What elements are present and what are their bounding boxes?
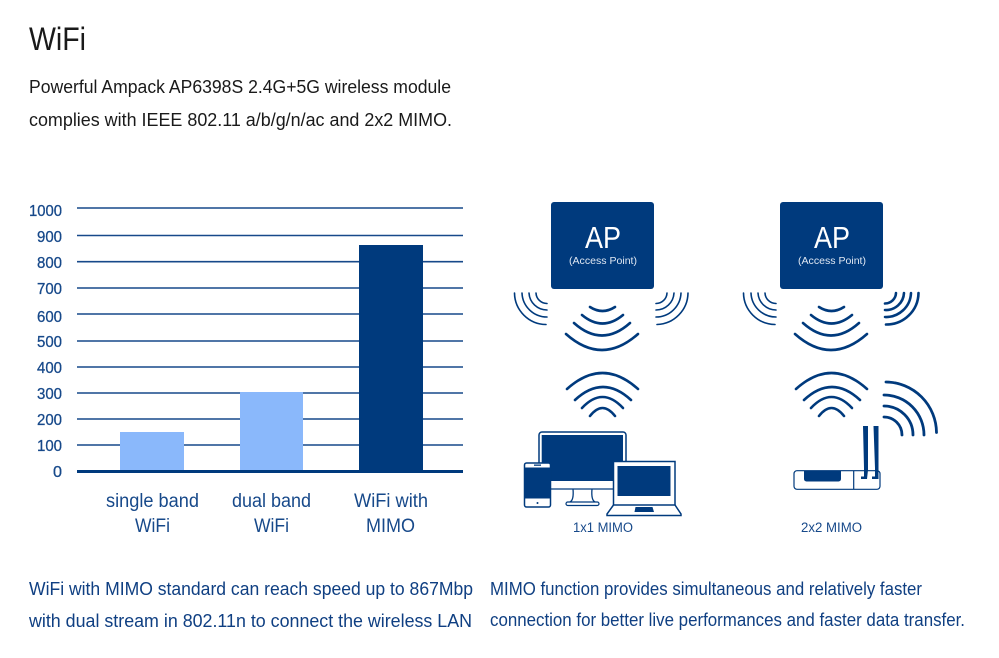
x axis labels: dual band (232, 491, 311, 512)
tablet (524, 463, 550, 507)
bar: dual band WiFi (240, 392, 303, 471)
y axis labels: 200 (37, 412, 62, 429)
bar: WiFi with MIMO (359, 245, 423, 471)
y axis labels: 800 (37, 255, 62, 272)
laptop (614, 462, 675, 506)
intro text: complies with IEEE 802.11 a/b/g/n/ac and 2x2 MIMO. (29, 110, 452, 130)
y axis labels (29, 203, 62, 481)
AP box: AP (585, 220, 621, 255)
x axis labels (106, 491, 428, 537)
diagram: 2x2 MIMO (744, 202, 936, 535)
AP box: AP (814, 220, 850, 255)
y axis labels: 0 (53, 464, 62, 481)
bar chart (29, 203, 463, 537)
signal arcs from AP (744, 293, 918, 350)
x axis labels: WiFi (135, 516, 170, 537)
y axis labels: 500 (37, 334, 62, 351)
y axis labels: 900 (37, 229, 62, 246)
icon: router with antennas (794, 426, 880, 489)
caption: 2x2 MIMO (801, 520, 862, 535)
y axis labels: 400 (37, 360, 62, 377)
monitor (539, 432, 626, 489)
bottom right text: MIMO function provides simultaneous and relatively faster (490, 579, 922, 599)
y axis labels: 300 (37, 386, 62, 403)
bottom left text: with dual stream in 802.11n to connect the wireless LAN (28, 611, 472, 631)
AP box: (Access Point) (569, 255, 637, 267)
x axis labels: MIMO (366, 516, 415, 537)
AP box (551, 202, 654, 289)
bottom right text: connection for better live performances and faster data transfer. (490, 610, 965, 630)
icon: devices (524, 432, 681, 516)
bottom left text: WiFi with MIMO standard can reach speed up to 867Mbp (29, 579, 473, 599)
y axis labels: 700 (37, 281, 62, 298)
title: WiFi (29, 21, 86, 57)
diagram: 1x1 MIMO (514, 202, 688, 535)
signal arcs from AP (514, 293, 688, 350)
y axis labels: 1000 (29, 203, 62, 220)
intro text (29, 77, 452, 130)
bar: single band WiFi (120, 432, 184, 471)
y axis labels: 600 (37, 309, 62, 326)
x axis labels: single band (106, 491, 199, 512)
caption: 1x1 MIMO (573, 520, 633, 535)
x axis labels: WiFi with (354, 491, 428, 512)
AP box (780, 202, 883, 289)
signal arcs to router (796, 373, 867, 416)
bottom left text (28, 579, 473, 631)
signal arcs to device (567, 373, 638, 416)
x axis labels: WiFi (254, 516, 289, 537)
y axis labels: 100 (37, 438, 62, 455)
AP box: (Access Point) (798, 255, 866, 267)
bottom right text (490, 579, 965, 630)
intro text: Powerful Ampack AP6398S 2.4G+5G wireless module (29, 77, 451, 97)
side signal arcs from antennas (884, 382, 936, 435)
